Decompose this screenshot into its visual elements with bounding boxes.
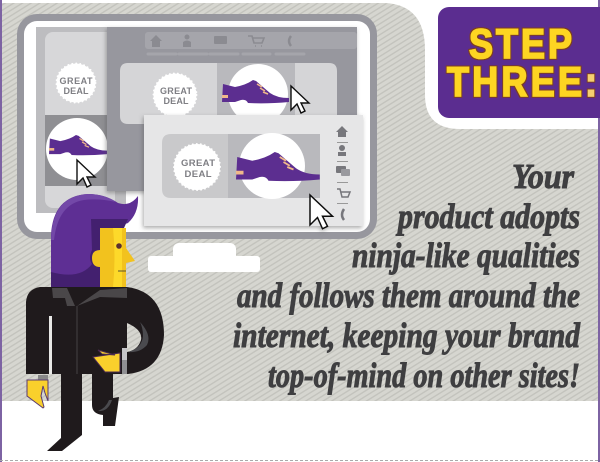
cursor: [310, 195, 332, 229]
great deal badge: GREAT: [60, 76, 93, 86]
body text: [233, 157, 580, 395]
great deal badge: GREAT: [160, 86, 192, 96]
great deal badge: [56, 64, 96, 102]
hair: [51, 194, 138, 287]
great deal badge: GREAT: [181, 158, 215, 169]
collar: [52, 288, 127, 306]
front browser window: [144, 115, 363, 229]
center seam: [76, 306, 78, 374]
great deal badge: DEAL: [64, 86, 89, 96]
shoe product circle: [46, 118, 108, 180]
step three heading: :: [585, 60, 597, 106]
product strip: [162, 133, 320, 199]
arm highlight: [98, 322, 148, 411]
cursor: [291, 86, 309, 113]
great deal badge: DEAL: [164, 96, 189, 106]
body and arm: [26, 287, 164, 451]
cuffs: [38, 348, 127, 381]
product strip: [120, 63, 337, 124]
shoe product circle: [222, 64, 289, 124]
bottom dotted rule: [0, 460, 600, 462]
cursor: [77, 160, 95, 187]
navigation bar: [145, 32, 357, 54]
body text: Your: [512, 157, 574, 196]
great deal badge: DEAL: [184, 169, 212, 180]
back hand: [27, 380, 48, 408]
great deal badge: [174, 144, 220, 190]
shoe product circle: [236, 133, 320, 199]
great deal badge: [154, 74, 196, 116]
sleeve gap: [49, 316, 52, 374]
back browser window: [36, 27, 126, 213]
ninja character: [26, 194, 164, 451]
sidebar icons: [336, 126, 350, 220]
monitor stand: [148, 243, 260, 272]
front hand: [93, 350, 120, 372]
step three heading: STEP: [469, 22, 572, 68]
face: [92, 228, 135, 287]
step three heading: THREE: [447, 60, 582, 106]
middle browser window: [107, 27, 357, 191]
monitor: [17, 14, 377, 239]
step three heading: [438, 7, 600, 118]
